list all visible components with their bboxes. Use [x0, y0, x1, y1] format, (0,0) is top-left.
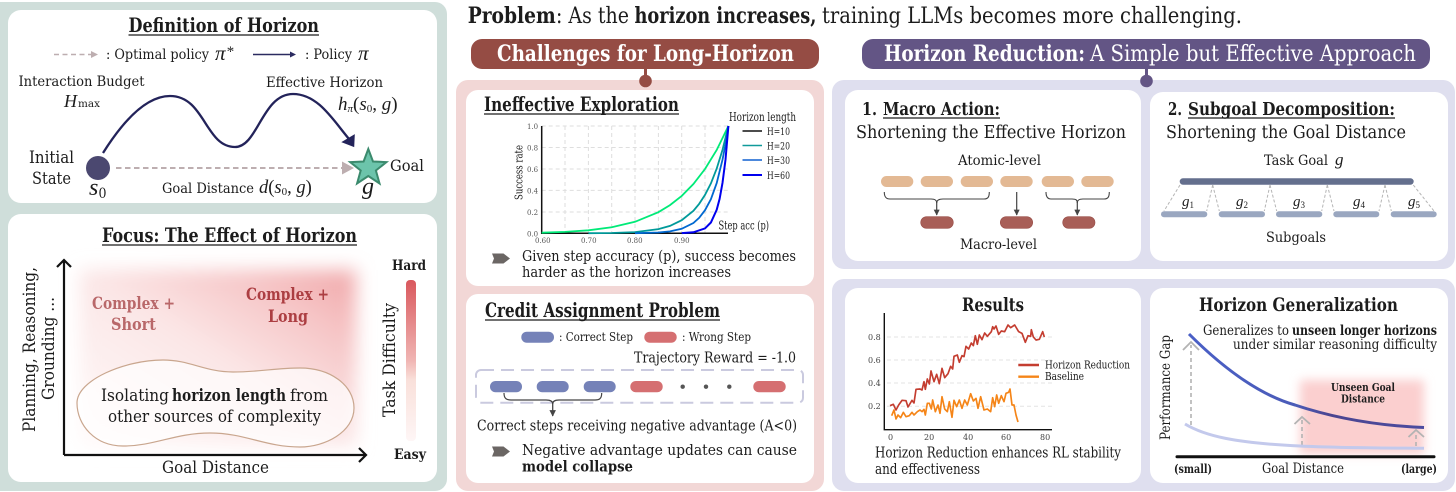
chart: results line chart: 60	[1001, 433, 1011, 442]
legend: policy: : Policy	[305, 47, 352, 63]
heading: ineffective exploration: Ineffective Exploration	[484, 93, 679, 116]
label: complex long	[246, 285, 329, 326]
callout: isolating horizon length: Isolating	[101, 386, 169, 405]
label: complex short: Short	[111, 315, 156, 334]
diagram: atomic to macro steps	[881, 176, 1114, 228]
header: challenges for long-horizon	[471, 39, 819, 87]
chart: results line chart: 0.6	[868, 356, 881, 365]
title: problem statement	[468, 3, 1242, 29]
label: interaction budget: Interaction Budget	[18, 74, 145, 90]
label: goal distance: ,	[287, 178, 296, 198]
label: goal distance	[162, 178, 312, 198]
legend: correct step	[521, 329, 633, 344]
callout: isolating horizon length: from	[290, 386, 328, 405]
chart: success rate vs step accuracy: 0.70	[581, 237, 597, 245]
diagram: goal split into subgoals: g	[1293, 194, 1300, 210]
chart: results line chart: 80	[1040, 433, 1050, 442]
chart: results line chart	[868, 313, 1052, 442]
x axis label: Goal Distance	[162, 458, 269, 477]
legend: optimal policy: : Optimal policy	[106, 47, 209, 63]
chart: success rate vs step accuracy: 0.0	[527, 230, 538, 238]
label: effective horizon: g)	[382, 94, 398, 115]
legend: policy	[253, 41, 369, 65]
label: interaction budget: max	[78, 99, 100, 110]
callout: isolating horizon length	[77, 360, 354, 447]
label: complex long: Long	[268, 307, 308, 326]
chart: success rate vs step accuracy: 0.80	[627, 237, 643, 245]
chart axes	[57, 260, 366, 462]
x axis labels: Goal Distance	[1262, 461, 1344, 477]
card: results	[845, 288, 1141, 483]
callout: isolating horizon length: horizon length	[172, 386, 286, 405]
line: performance gap curve	[1189, 334, 1424, 428]
heading: definition of horizon: Definition of Horizon	[128, 14, 319, 37]
heading: subgoal decomposition: Subgoal Decomposition:	[1188, 100, 1395, 120]
diagram: goal split into subgoals: 4	[1360, 200, 1366, 210]
label: complex short	[92, 294, 175, 334]
title: problem statement: Problem	[468, 3, 556, 29]
label: s0: s	[89, 175, 98, 201]
label: effective horizon: ,	[372, 94, 382, 115]
y axis label: Performance Gap	[1158, 335, 1174, 440]
legend: horizon length: H=10	[767, 126, 790, 138]
label: effective horizon	[266, 75, 398, 115]
title: problem statement: training LLMs becomes more challenging.	[822, 4, 1242, 29]
label: effective horizon: h	[338, 94, 348, 115]
region: unseen goal distance: Unseen Goal	[1331, 380, 1395, 394]
header: horizon reduction	[862, 39, 1430, 87]
text: credit takeaway: Negative advantage updates can cause	[522, 441, 797, 459]
text: credit takeaway	[522, 441, 797, 476]
heading: subgoal decomposition: Shortening the Goal Distance	[1166, 123, 1406, 143]
legend: optimal policy: π	[215, 41, 226, 65]
label: goal distance: g)	[296, 178, 312, 198]
legend: horizon length: H=30	[767, 155, 790, 167]
heading: macro action	[856, 100, 1126, 143]
label: effective horizon: Effective Horizon	[266, 75, 383, 91]
chart: success rate vs step accuracy: Step acc (p)	[718, 218, 769, 232]
card: credit assignment problem	[466, 294, 814, 483]
chart: success rate vs step accuracy: 0.60	[535, 237, 551, 245]
label: effective horizon: 0	[367, 103, 373, 115]
label: s0: 0	[98, 186, 106, 202]
arrow: optimal path	[116, 162, 354, 174]
heading: macro action: Shortening the Effective Horizon	[856, 123, 1126, 143]
line: baseline curve	[1185, 424, 1424, 448]
chart: results line chart: 20	[924, 433, 934, 442]
x axis labels	[1174, 461, 1437, 477]
chart: results line chart: 40	[963, 433, 973, 442]
legend: wrong step: : Wrong Step	[682, 329, 751, 344]
icon: goal star	[350, 149, 386, 183]
text: generalization note: under similar reasoning difficulty	[1233, 337, 1437, 353]
text: results takeaway	[875, 446, 1122, 478]
text: results takeaway: and effectiveness	[875, 462, 980, 478]
x axis labels: (small)	[1174, 461, 1212, 476]
legend: task difficulty scale: Task Difficulty	[380, 302, 399, 417]
icon: initial state node	[86, 156, 110, 180]
title: problem statement: horizon increases,	[634, 3, 816, 29]
diagram: trajectory steps	[476, 370, 803, 416]
x axis	[1177, 455, 1434, 458]
text: generalization note	[1203, 323, 1437, 353]
label: g: g	[362, 174, 374, 200]
chart: results line chart: 0	[888, 433, 893, 442]
chart: success rate vs step accuracy	[512, 123, 769, 245]
header: challenges for long-horizon: Challenges for Long-Horizon	[497, 41, 794, 67]
label: goal distance: Goal Distance	[162, 181, 254, 197]
heading: focus: Focus: The Effect of Horizon	[102, 224, 357, 247]
icon: gray arrow	[492, 446, 510, 456]
text: exploration takeaway: harder as the horizon increases	[522, 263, 731, 281]
chart: success rate vs step accuracy: 0.4	[527, 187, 539, 195]
diagram: goal split into subgoals: g	[1408, 194, 1416, 210]
label: macro level: Macro-level	[960, 237, 1037, 253]
label: initial state: State	[32, 169, 71, 188]
callout: isolating horizon length: other sources of complexity	[108, 407, 322, 426]
arrows: performance gap	[1183, 342, 1424, 446]
chart: success rate vs step accuracy: 0.6	[527, 166, 539, 174]
label: subgoals: Subgoals	[1266, 230, 1326, 246]
panel: definition of horizon	[8, 10, 437, 203]
x axis labels: (large)	[1401, 461, 1437, 476]
diagram: goal split into subgoals	[1161, 178, 1437, 217]
label: initial state	[29, 148, 74, 188]
label: complex long: Complex +	[246, 285, 329, 304]
label: complex short: Complex +	[92, 294, 175, 313]
legend: results: Baseline	[1045, 369, 1084, 383]
label: trajectory reward: Trajectory Reward = -1.0	[634, 349, 796, 367]
legend: task difficulty scale: Easy	[394, 447, 427, 463]
heading: subgoal decomposition: 2.	[1168, 100, 1182, 120]
diagram: goal split into subgoals: g	[1182, 194, 1190, 210]
text: negative advantage note: Correct steps receiving negative advantage (A<0)	[477, 419, 797, 435]
label: effective horizon: s	[359, 94, 367, 115]
y axis label	[20, 267, 58, 432]
text: exploration takeaway	[522, 247, 796, 281]
panel: focus effect of horizon	[8, 214, 437, 482]
diagram: goal split into subgoals: 1	[1190, 200, 1194, 210]
text: exploration takeaway: Given step accuracy (p), success becomes	[522, 247, 796, 265]
heading: horizon generalization: Horizon Generalization	[1199, 295, 1398, 316]
region: unseen goal distance: Distance	[1341, 392, 1385, 406]
panel: horizon reduction results background	[832, 279, 1455, 491]
chart: results line chart: 0.8	[868, 333, 881, 342]
header: horizon reduction: A Simple but Effective Approach	[1089, 42, 1416, 67]
chart: success rate vs step accuracy: 0.8	[527, 144, 538, 152]
heading: subgoal decomposition	[1166, 100, 1406, 143]
region: unseen goal distance	[1300, 380, 1424, 454]
legend: horizon length	[729, 110, 796, 182]
legend: horizon length: H=20	[767, 140, 790, 152]
diagram: goal split into subgoals: g	[1353, 194, 1360, 210]
text: results takeaway: Horizon Reduction enhances RL stability	[875, 446, 1122, 462]
label: task goal: Task Goal	[1264, 153, 1328, 169]
card: macro action	[845, 90, 1141, 261]
panel: challenges background	[456, 80, 824, 491]
label: interaction budget: H	[63, 91, 78, 111]
chart: results line chart: 0.2	[868, 402, 881, 411]
chart: success rate vs step accuracy: Success rate	[512, 145, 526, 200]
label: effective horizon: (	[353, 94, 359, 115]
label: interaction budget	[18, 74, 145, 111]
diagram: goal split into subgoals: 5	[1416, 200, 1420, 210]
icon: gray arrow	[492, 254, 510, 264]
label: goal: Goal	[390, 157, 424, 175]
diagram: goal split into subgoals: g	[1236, 194, 1244, 210]
heading: macro action: Macro Action:	[883, 100, 1000, 120]
legend: horizon length: H=60	[767, 170, 790, 182]
text: credit takeaway: model collapse	[522, 458, 633, 476]
y axis label: Grounding ...	[39, 297, 58, 400]
chart: success rate vs step accuracy: 0.90	[674, 237, 690, 245]
heading: macro action: 1.	[862, 100, 877, 120]
legend: correct step: : Correct Step	[559, 329, 633, 344]
label: task goal: g	[1335, 150, 1344, 169]
legend: results	[1018, 357, 1130, 383]
label: s0	[89, 175, 106, 202]
label: goal distance: 0	[282, 186, 288, 198]
legend: task difficulty scale: Hard	[392, 258, 426, 274]
diagram: goal split into subgoals: 2	[1244, 200, 1248, 210]
legend: wrong step	[644, 329, 751, 344]
card: subgoal decomposition	[1150, 92, 1448, 261]
header: horizon reduction: Horizon Reduction:	[884, 41, 1085, 67]
legend: results: Horizon Reduction	[1045, 357, 1130, 371]
text: generalization note: Generalizes to	[1203, 323, 1289, 339]
heatmap: difficulty	[80, 270, 356, 446]
chart: success rate vs step accuracy: 0.2	[527, 209, 538, 217]
chart: success rate vs step accuracy: 1.0	[527, 123, 538, 131]
card: horizon generalization	[1150, 288, 1448, 483]
label: effective horizon: π	[348, 103, 354, 115]
card: ineffective exploration	[466, 90, 814, 286]
label: initial state: Initial	[29, 148, 74, 167]
arrow: policy trajectory	[103, 94, 354, 153]
panel: horizon background	[0, 2, 447, 491]
legend: policy: π	[358, 41, 369, 65]
heading: credit assignment: Credit Assignment Problem	[485, 299, 720, 322]
legend: task difficulty scale	[380, 258, 427, 463]
y axis label: Planning, Reasoning,	[20, 267, 39, 432]
chart: results line chart: 0.4	[868, 379, 881, 388]
label: goal distance: d(s	[259, 178, 282, 198]
legend: optimal policy	[54, 41, 234, 65]
title: problem statement: : As the	[556, 4, 629, 29]
heading: results: Results	[962, 295, 1024, 316]
legend: horizon length: Horizon length	[729, 110, 796, 124]
diagram: goal split into subgoals: 3	[1300, 200, 1306, 210]
panel: horizon reduction methods background	[832, 80, 1455, 269]
label: atomic level: Atomic-level	[957, 153, 1041, 169]
legend: optimal policy: *	[226, 44, 234, 60]
